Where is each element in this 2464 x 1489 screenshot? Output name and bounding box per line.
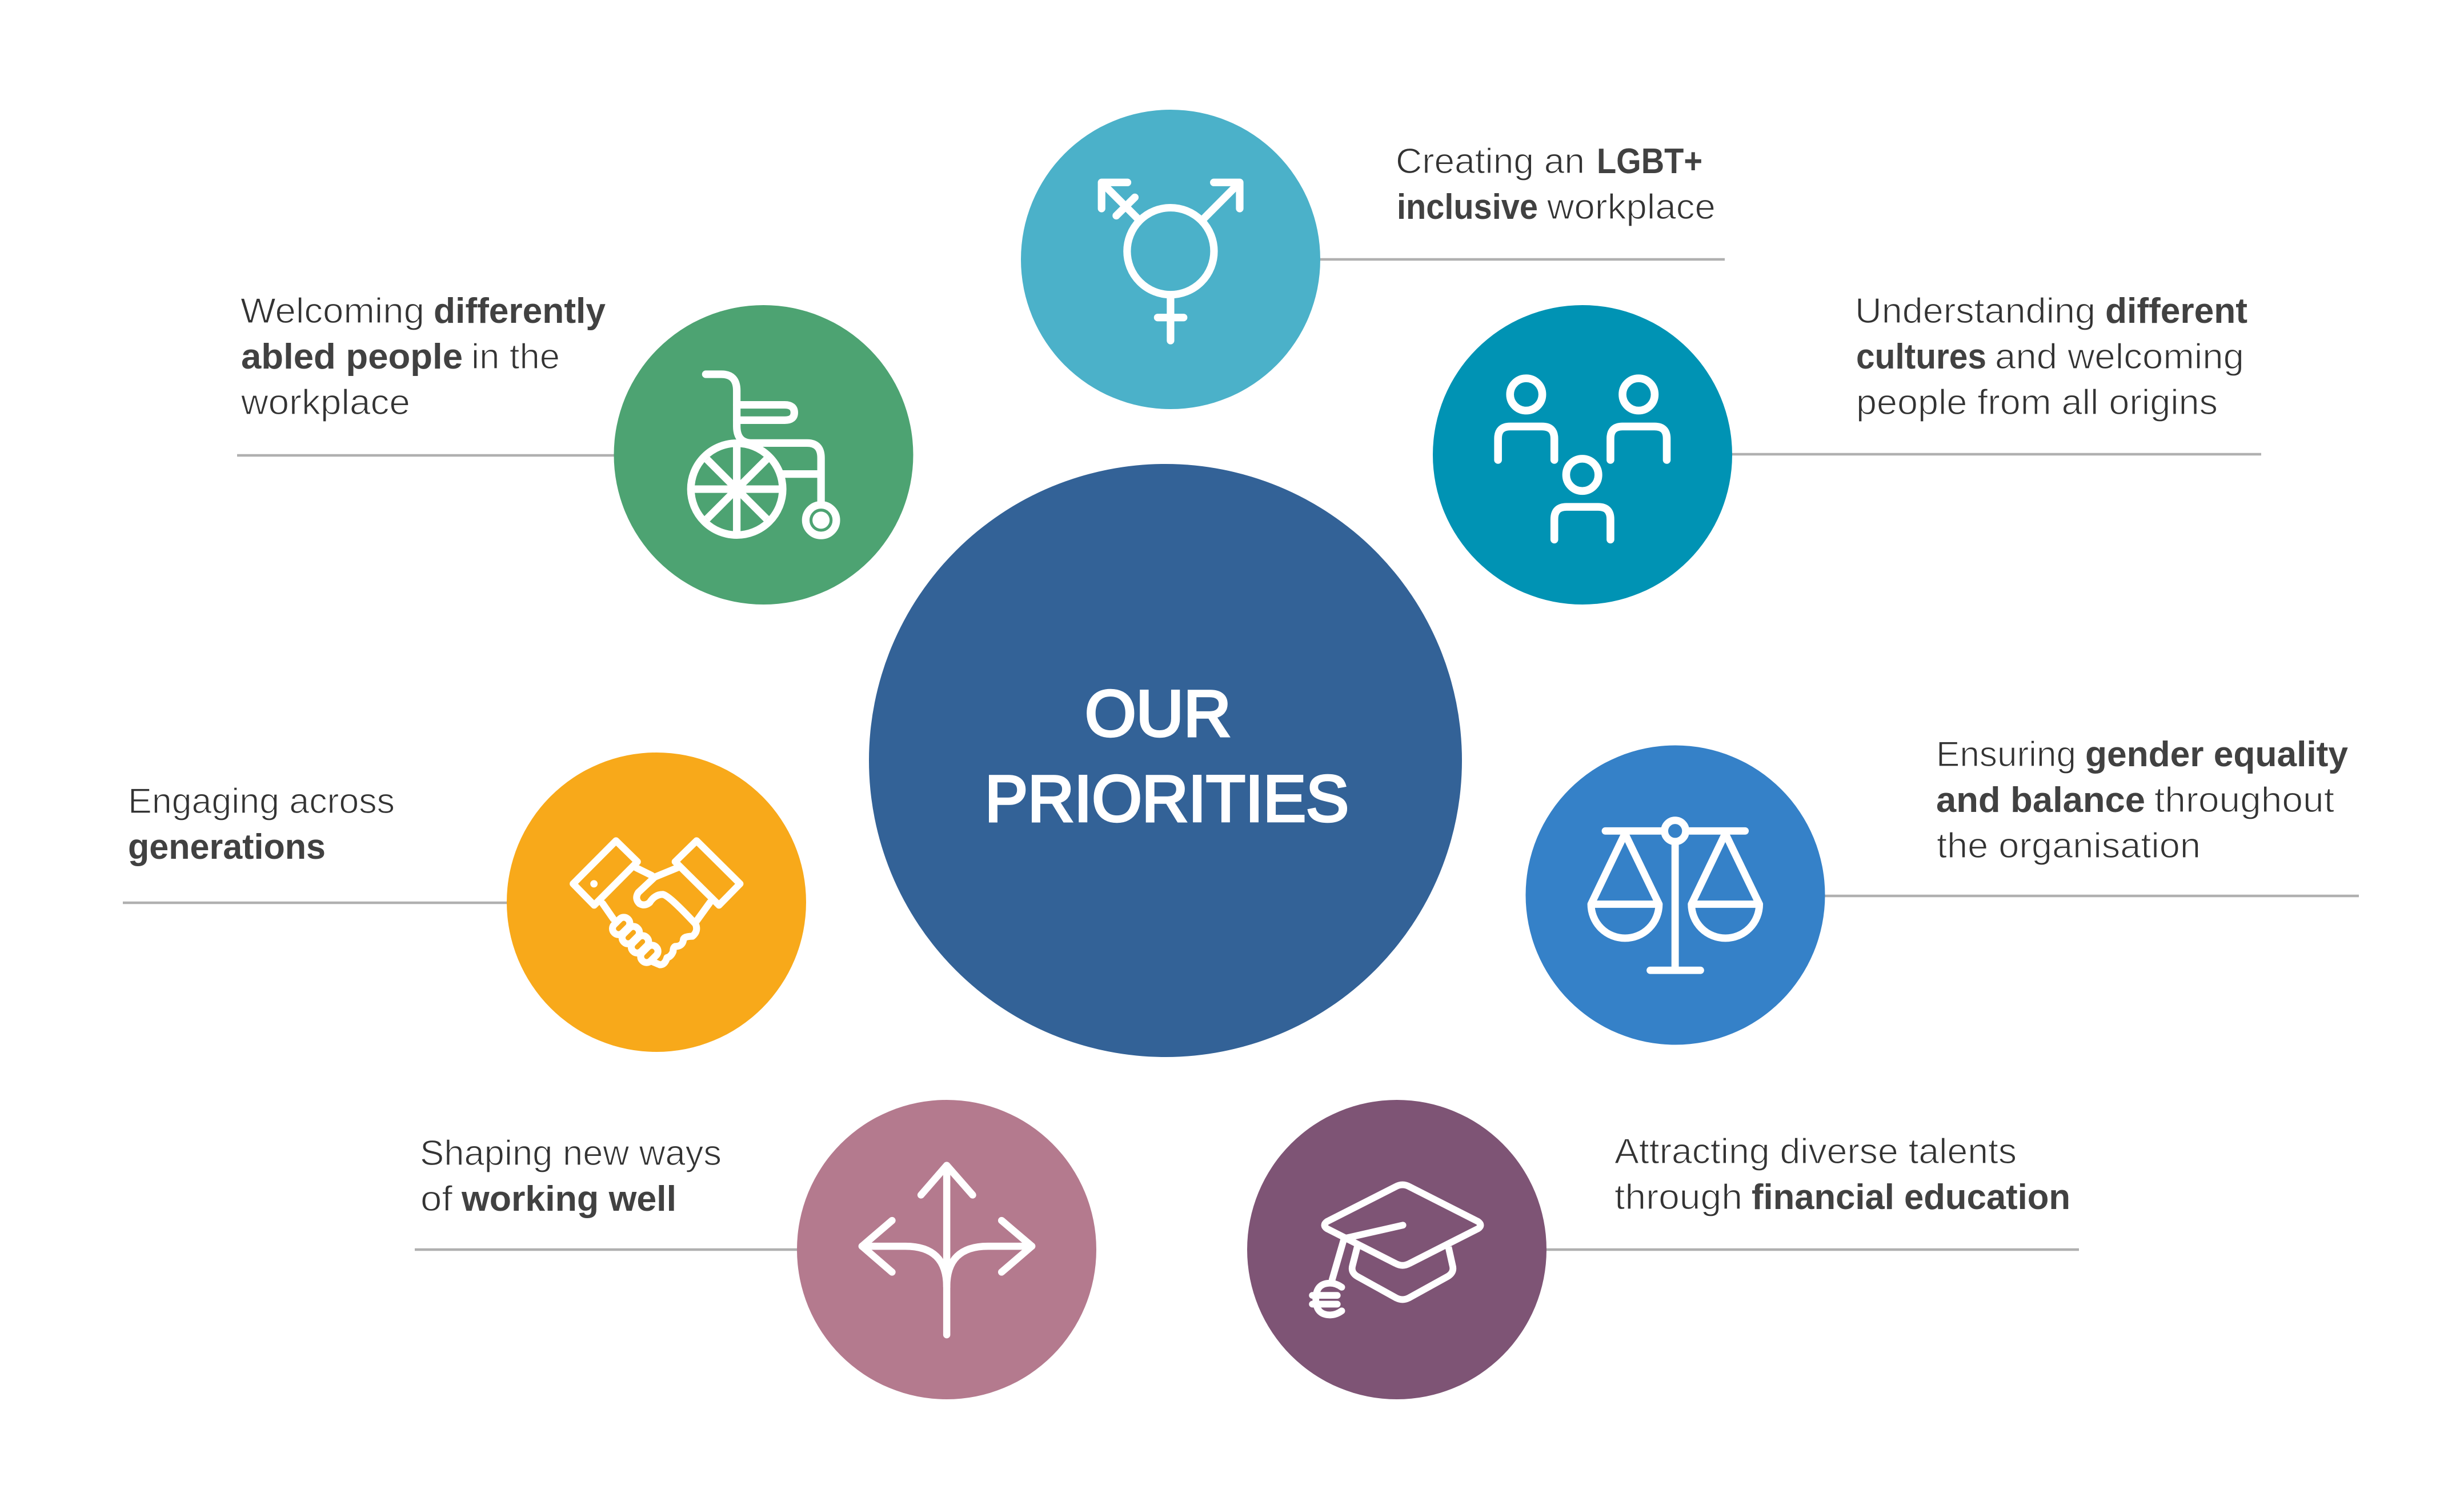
text: LGBT+ inclusive workplace: LGBT+ (1597, 142, 1702, 181)
text: differently abled people: abled people (241, 337, 463, 377)
central circle: our priorities (869, 464, 1462, 1057)
text: LGBT+ inclusive workplace (1396, 142, 1716, 227)
title: OUR (1085, 678, 1231, 750)
text: financial education: financial education (1752, 1178, 2070, 1217)
text: financial education: through (1614, 1178, 1742, 1217)
text: different cultures: different (2105, 291, 2247, 331)
panel: financial education (1247, 1100, 2079, 1399)
icon: graduation cap with euro (1312, 1185, 1481, 1315)
icon: handshake (573, 840, 740, 965)
text: financial education (1614, 1132, 2070, 1217)
panel: generations (123, 752, 806, 1052)
text: differently abled people (241, 291, 606, 422)
text: gender equality: gender equality (2085, 735, 2349, 774)
panel: working well (415, 1100, 1096, 1399)
text: differently abled people: workplace (241, 383, 410, 422)
text: generations: Engaging across (128, 782, 395, 821)
text: gender equality (1936, 735, 2349, 866)
text: differently abled people: Welcoming (241, 291, 424, 331)
text: gender equality: the organisation (1937, 826, 2201, 866)
icon: wheelchair (691, 374, 836, 535)
text: differently abled people: in the (471, 337, 560, 377)
panel: different cultures (1433, 291, 2261, 605)
text: LGBT+ inclusive workplace: workplace (1546, 187, 1716, 227)
text: different cultures: and welcoming (1995, 337, 2244, 377)
icon: three-way arrows (862, 1166, 1032, 1335)
text: working well (420, 1134, 722, 1219)
text: different cultures: people from all origins (1856, 383, 2218, 422)
text: differently abled people: differently (434, 291, 606, 331)
text: working well: Shaping new ways (420, 1134, 722, 1173)
panel: gender equality (1525, 735, 2359, 1044)
title (985, 678, 1349, 835)
text: generations (128, 782, 395, 867)
text: LGBT+ inclusive workplace: Creating an (1396, 142, 1585, 181)
text: working well: of (420, 1179, 453, 1219)
text: generations: generations (128, 827, 326, 867)
text: gender equality: and balance (1936, 780, 2145, 820)
text: financial education: Attracting diverse talents (1614, 1132, 2017, 1171)
icon: balance scales (1591, 820, 1760, 970)
icon: three people (1498, 378, 1666, 539)
text: gender equality: Ensuring (1936, 735, 2076, 774)
text: different cultures: Understanding (1855, 291, 2096, 331)
text: working well: working well (461, 1179, 676, 1219)
text: gender equality: throughout (2154, 780, 2334, 820)
panel: LGBT+ inclusive workplace (1021, 110, 1725, 409)
text: different cultures: cultures (1856, 337, 1986, 377)
icon: transgender symbol (1101, 182, 1240, 341)
title: PRIORITIES (985, 763, 1349, 835)
panel: differently abled people (237, 291, 913, 605)
text: different cultures (1855, 291, 2247, 422)
text: LGBT+ inclusive workplace: inclusive (1397, 187, 1538, 227)
